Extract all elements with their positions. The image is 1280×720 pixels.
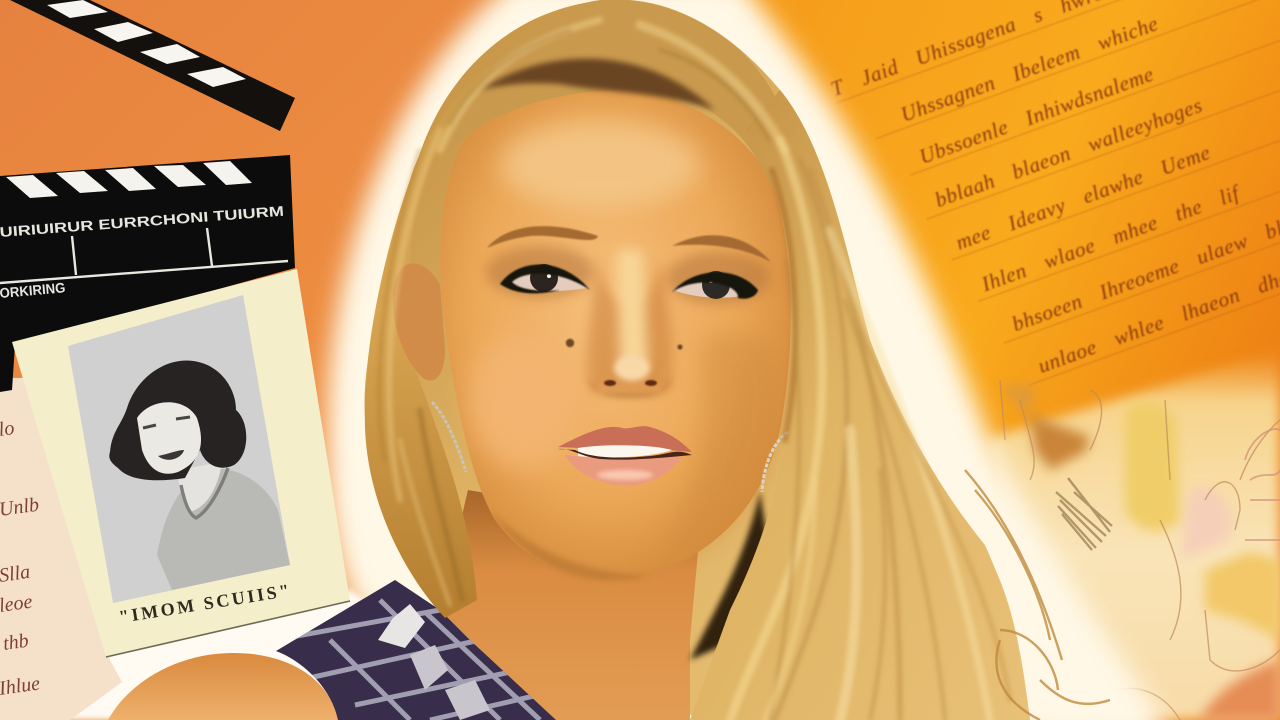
background: amber right panel xyxy=(700,0,1280,720)
left eye xyxy=(500,264,590,293)
plaid light checks xyxy=(378,604,490,720)
left eye socket xyxy=(486,246,594,298)
hair wisps lower right xyxy=(965,470,1110,720)
upper lip xyxy=(558,426,692,452)
teeth xyxy=(578,445,672,458)
white glow around portrait xyxy=(327,0,1175,720)
right eyebrow xyxy=(672,235,771,262)
neck xyxy=(440,490,700,720)
background: sketch wash lower right xyxy=(985,350,1280,720)
sketch comb hatching xyxy=(1056,478,1112,550)
nose tip xyxy=(588,355,672,398)
back hair xyxy=(365,0,1030,720)
background: orange left panel xyxy=(0,0,760,720)
plaid stripes xyxy=(296,598,542,720)
portrait lips xyxy=(158,450,184,460)
aged paper behind card xyxy=(0,378,122,720)
left cheek xyxy=(470,332,580,468)
dark hair under jaw xyxy=(690,490,770,660)
clapper field labels: UIRIUIRUR EURRCHONI TUIURM xyxy=(0,203,284,240)
right hair front xyxy=(690,90,1030,720)
portrait face xyxy=(137,402,201,474)
black and white photo xyxy=(68,295,290,603)
ruled lines xyxy=(836,0,1280,414)
portrait features xyxy=(143,417,190,428)
right eye socket xyxy=(666,252,770,304)
clapper lower label: ORKIRING xyxy=(0,279,66,301)
sketch pink drawing xyxy=(1245,429,1280,540)
handwritten letter xyxy=(828,0,1280,414)
crown hair xyxy=(450,0,787,190)
letter text: mee Ideavy elawhe Ueme xyxy=(953,140,1214,255)
portrait hair xyxy=(109,360,246,480)
moles xyxy=(566,339,683,350)
left eyebrow xyxy=(487,226,598,248)
sketch drawing lower right xyxy=(1000,380,1280,720)
right cheek shadow xyxy=(650,333,782,570)
plaid top xyxy=(270,575,570,720)
photo card xyxy=(12,269,350,657)
left earring xyxy=(432,402,466,472)
lower lip highlight xyxy=(597,470,653,480)
nose bridge highlight xyxy=(617,250,648,365)
paper handwriting xyxy=(0,417,42,700)
letter text: bblaah blaeon walleeyhoges xyxy=(932,93,1206,212)
paper handwriting: thb xyxy=(2,630,30,655)
white area under card xyxy=(60,590,420,720)
letter text: Ihlen wlaoe mhee the lif xyxy=(977,180,1245,297)
portrait collar xyxy=(181,468,228,518)
shoulder xyxy=(108,653,338,720)
portrait neck xyxy=(178,462,222,512)
clapper grid lines xyxy=(0,228,288,283)
hair strands xyxy=(379,20,1010,720)
hair part shadow xyxy=(480,59,715,110)
mouth line xyxy=(558,449,692,460)
clapper stripes xyxy=(6,161,252,198)
nose sides xyxy=(587,260,673,392)
sketch outlines xyxy=(1000,380,1280,720)
letter text xyxy=(828,0,1280,412)
card caption: "IMOM SCUIIS" xyxy=(117,580,291,627)
forehead highlight xyxy=(500,121,700,209)
chin shadow xyxy=(490,510,650,580)
face xyxy=(440,88,791,581)
right earring xyxy=(762,432,788,492)
stick stripes xyxy=(47,0,246,87)
ear xyxy=(393,263,445,381)
portrait sweater xyxy=(157,469,290,590)
right eye xyxy=(672,271,758,299)
letter text: Uhssagnen Ibeleem whiche xyxy=(897,11,1161,127)
clapperboard body xyxy=(0,155,295,392)
left hair front xyxy=(365,5,600,618)
lower lip xyxy=(565,455,682,485)
mouth xyxy=(558,426,692,485)
clapperboard top stick xyxy=(10,0,295,131)
sketch shaded patches xyxy=(1000,385,1280,720)
portrait xyxy=(108,0,1110,720)
letter text: Ubssoenle Inhiwdsnaleme xyxy=(916,62,1157,169)
